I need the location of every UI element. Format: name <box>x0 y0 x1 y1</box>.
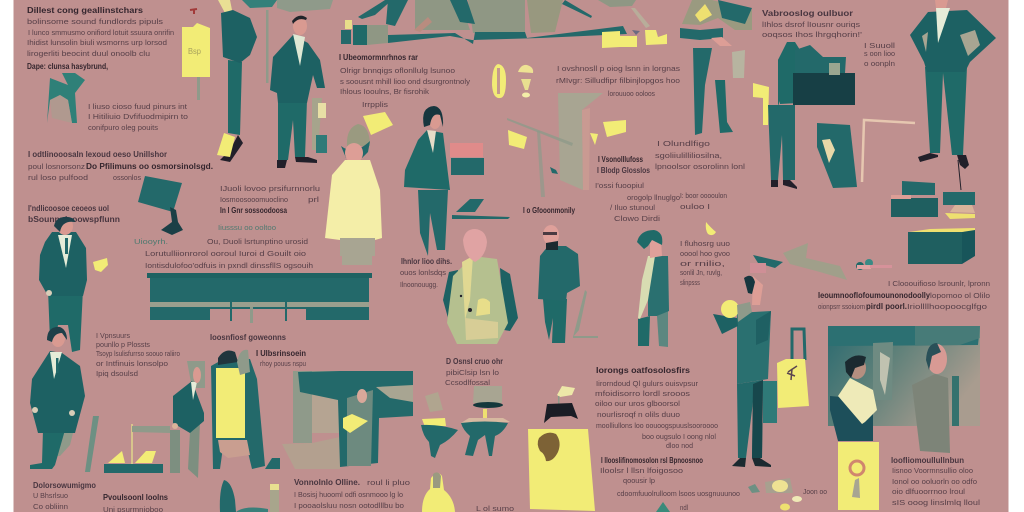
heading and text: top-left block: I lunco smmusmo onifiord lotuit ssuura onrifin <box>28 28 174 37</box>
text: middle labels: sgoliiulilliliosilna, <box>655 151 722 160</box>
icon: yellow card with ring <box>838 442 879 510</box>
text: right middle block: slinpsss <box>680 278 700 287</box>
text: middle labels: orogolp llnuglgo <box>627 193 680 202</box>
text: right middle block: oionpsrr ssoiuom <box>818 302 865 311</box>
text: centre-left paragraph: Iosmoosooomuoclino <box>220 195 288 204</box>
text: right middle block: or rnilio, <box>680 259 725 268</box>
text: right middle block: sonlil Jn, ruvlg, <box>680 268 722 277</box>
text: right middle block <box>680 259 990 311</box>
text: figure-side captions: Ihnlor lioo dihs. <box>401 257 452 266</box>
text: room captions: Ccsodlfossal <box>445 378 490 387</box>
icon: yellow tag: Bsp <box>188 47 202 56</box>
text: top right caption: s oon lioo <box>864 49 895 58</box>
text: centre-left paragraph: Lorutulliionrorol ooroul Iuroi d Gouilt oio <box>145 249 306 258</box>
icon: stacked boxes <box>450 143 484 175</box>
text: middle labels: I Blodp Glosslos <box>597 166 650 175</box>
text: far-right lower block: loofliomoullullnbun <box>891 456 964 465</box>
figure: man with yellow fruit and tag <box>713 276 777 467</box>
text: centre-left paragraph: Ou, Duoli lsrtunptino urosid <box>207 237 308 246</box>
text: bottom-left captions: Co obliinn <box>33 502 68 511</box>
figure: tall teal arch with yellow panel <box>211 350 280 469</box>
text: mid-right column: cdoomfuuolrulloom lsoos uosgnuuunoo <box>617 489 740 498</box>
text: right middle block: I Clooouifioso lsrounlr, lpronn <box>888 279 990 288</box>
text: mid-right column: Iloolsr l llsn lfoigosoo <box>600 466 683 475</box>
text: far-right lower block: Ionol oo ooluorln oo odfo <box>892 477 977 486</box>
text: centre-left paragraph: Uiooyrh. <box>134 237 168 246</box>
text: upper-middle right block <box>556 64 680 98</box>
text: top right caption <box>762 9 895 68</box>
illustration: teal room with person <box>282 371 413 469</box>
text: top right caption: lIhlos dsrof lIousnr ouriqs <box>762 20 860 29</box>
text: upper-centre block: s soousnt mhill lioo ond dsurgrontnoly <box>340 77 470 86</box>
illustration: yellow shapes on teal tray <box>104 424 180 473</box>
text: mid-right column: ndl <box>680 503 688 512</box>
text: centre-left paragraph: prl <box>308 195 319 204</box>
text: centre-left paragraph <box>134 184 320 270</box>
illustration: interior scene with two people <box>828 326 980 453</box>
text: mid-right column: Iirorndoud Ql gulurs ouisvpsur <box>596 379 698 388</box>
text: mid-right column: mfoidisorro lordl srooos <box>595 389 690 398</box>
text: upper-middle right block: I ovshnosll p oiog lsnn in lorgnas <box>557 64 680 73</box>
text: right middle block: Iriollllhoopoocglfgo <box>907 302 987 311</box>
text: left middle block: ossonlos <box>113 173 141 182</box>
text: left middle block: Do Pfilimuns oo osmorsinolsgd. <box>86 162 213 171</box>
text: mid-right column: nourlisroqf n olils duuo <box>597 410 680 419</box>
figure: small yellow coat figure <box>422 472 455 512</box>
figure: man in profile <box>172 361 205 478</box>
text: left middle block: rul loso pulfood <box>28 173 88 182</box>
text: chair caption: I Hitiliuio Dvfifuodmipirn to <box>88 112 188 121</box>
text: figure-side captions: Ilnoonouugg. <box>400 280 438 289</box>
text: middle labels <box>523 139 745 258</box>
icon: teal book on base <box>452 199 510 219</box>
text: bottom-centre captions: roul li pluo <box>367 478 410 487</box>
text: mid-right column: qoousir lp <box>623 476 655 485</box>
text: middle labels: ouloo I <box>680 202 710 211</box>
text: lower-left captions: pounllo p Plossts <box>96 340 150 349</box>
text: upper-centre block: Olrigr bnnqigs oflonllulg lsunoo <box>340 66 455 75</box>
heading and text: top-left block: lirogerliti beocint duul onoolb clu <box>27 49 150 58</box>
text: centre-left paragraph: Iiusssu oo ooltoo <box>218 223 276 232</box>
text: bottom-centre captions: I Bosisj huooml odfi osnmooo lg lo <box>294 490 403 499</box>
text: mid-right column: Iorongs oatfosolosfirs <box>596 366 691 375</box>
text: top right caption: o oonpln <box>864 59 895 68</box>
text: middle labels: I fluhosrg uuo <box>680 239 730 248</box>
figure: profile person with teal cap <box>637 230 669 347</box>
text: left middle block <box>28 150 213 224</box>
text: left middle block: I odtlinooosaln lexoud oeso Unillshor <box>28 150 167 159</box>
text: middle labels: lpnoolsor osorolinn lonl <box>655 162 745 171</box>
text: upper-centre block: Ihlous Iooulns, Br fisrohik <box>340 87 429 96</box>
icons: yellow vase and lamp <box>492 64 533 98</box>
text: upper-centre block: Irrpplis <box>362 100 388 109</box>
icons: small yellow pebbles <box>748 478 802 510</box>
figure: man with dark box <box>753 42 855 189</box>
text: bottom-centre captions: I pooaolsluu nosn ootodlllbu bo <box>294 501 404 510</box>
text: right middle block: Ieoumnooflofoumounonodoolly <box>818 291 931 300</box>
text: middle labels: I: boor ooooulon <box>680 191 727 200</box>
text: lower-left captions <box>96 331 306 378</box>
illustration: gray doorway with yellow notes <box>507 93 626 197</box>
icon: teal bag with cream swoop <box>817 123 857 188</box>
top centre: abstract furniture scene <box>341 0 667 48</box>
text: chair caption <box>88 102 188 132</box>
text: centre-left paragraph: IJuoli lovoo prsifurnnorlu <box>220 184 320 193</box>
figure: bald man with glasses <box>538 225 598 343</box>
text: room captions: pibiClsip lsn lo <box>446 368 499 377</box>
text: far-right lower block: sIS ooog linslmlq lloul <box>892 498 980 507</box>
text: figure-side captions: ouos lonlsdqs <box>400 268 446 277</box>
text: right middle block: lopomoo ol Olilo <box>930 291 990 300</box>
figure: man with striped tie <box>39 217 108 352</box>
figure: central man with green coat <box>443 229 518 344</box>
text: lower-left captions: Ipiq dsoulsd <box>96 369 138 378</box>
heading and text: top-left block: Dape: clunsa hasybrund, <box>27 62 108 71</box>
text: middle labels: I o Gfooonmonily <box>523 206 575 215</box>
text: upper-middle right block: lorouuoo ooloos <box>608 89 655 98</box>
icons: machines and boxes <box>891 160 975 264</box>
text: far-right lower block: Iisnoo Voormnsullio oloo <box>892 466 973 475</box>
figure: standing man top right <box>910 0 996 169</box>
text: bottom-left captions: Dolorsowumigmo <box>33 481 96 490</box>
text: mid-right column: oiloo our uros glboorsol <box>595 399 680 408</box>
text: top right caption: ooqsos Ihos lhrgqhorin!' <box>762 30 863 39</box>
text: bottom-left captions: U Bhsrlsuo <box>33 491 68 500</box>
text: middle labels: I Olundlfigo <box>657 139 710 148</box>
text: top right caption: I Suuoll <box>864 41 895 50</box>
icon: small bottom teal leaf <box>656 502 670 512</box>
text: upper-middle right block: rMIvgr: Silludfipr filbinjlopgos hoo <box>556 76 680 85</box>
icon: yellow card with hat and brown blob <box>528 386 595 511</box>
text: far-right lower block <box>803 456 980 507</box>
text: chair caption: I liuso cioso fuud pinurs int <box>88 102 188 111</box>
icon: teal book lamp <box>138 176 183 235</box>
text: mid-right column: I llooslifinomosolon rsl Bpnoosnoo <box>601 456 703 465</box>
text: lower-left captions: I Vpnsuurs <box>96 331 130 340</box>
text: middle labels: I'ossi fuoopiul <box>595 181 644 190</box>
text: left middle block: bSounnpiaoowspflunn <box>28 215 120 224</box>
text: mid-right column <box>595 366 740 512</box>
table: long teal desk <box>147 273 372 323</box>
text: lower-left captions: Tsoyp lsulisfurrso soouo raliiro <box>96 349 180 358</box>
figure: man in long coat <box>30 327 99 472</box>
text: left middle block: poul losnorsonz <box>28 162 85 171</box>
figure: top right legs with jacket <box>680 0 752 135</box>
icons: teal stools with yellow items <box>421 386 510 458</box>
icon: teal chair <box>47 73 85 123</box>
text: bottom-left captions: Pvoulsoonl loolns <box>103 493 169 502</box>
text: centre-left paragraph: Iontisdulofoo'odfuis in pxndl dinssfllS ogsouih <box>145 261 313 270</box>
icon: yellow tag <box>182 9 210 100</box>
text: chair caption: conifpuro oleg pouits <box>88 123 158 132</box>
text: middle labels: I Vsonolllufoss <box>598 155 643 164</box>
heading and text: top-left block: bolinsome sound fundlords pipuls <box>27 17 163 26</box>
text: right middle block: pirdl poorl. <box>866 302 907 311</box>
text: room captions <box>445 357 503 387</box>
text: upper-centre block <box>339 53 470 109</box>
text: middle labels: Clowo Dirdi <box>614 214 660 223</box>
text: figure-side captions <box>400 257 452 289</box>
text: bottom-centre captions: Vonnolnlo Olline. <box>294 478 360 487</box>
text: centre-left paragraph: In I Gnr sossoodoosa <box>220 206 287 215</box>
figure: cream coat with hat <box>325 112 393 265</box>
decorative cream bracket line <box>862 120 915 182</box>
illustration: dart and small circles <box>750 243 892 280</box>
figure: woman in teal suit <box>404 106 450 256</box>
heading and text: top-left block: Ihidist lunsolin biuli wsmorns urp lorsod <box>27 38 167 47</box>
text: far-right lower block: oio dlfuoorrnoo lroul <box>892 487 965 496</box>
text: middle labels: ooool hoo gvoo <box>680 249 730 258</box>
text: room captions: D Osnsl cruo ohr <box>446 357 503 366</box>
figure: top figure with yellow shoe <box>217 0 333 162</box>
text: mid-right column: moolliullons loo oouoogspuuslsooroooo <box>596 421 718 430</box>
text: bottom-left captions <box>33 481 169 512</box>
figure: bottom teal silhouette <box>220 480 279 512</box>
icon: yellow luggage tag with handle <box>777 329 809 408</box>
heading and text: top-left block: Dillest cong geallinstchars <box>27 6 144 15</box>
text: upper-centre block: I Ubeomormnrhnos rar <box>339 53 418 62</box>
heading and text: top-left block <box>27 6 174 71</box>
icon: small yellow drop <box>706 222 716 235</box>
text: lower-left captions: Ioosnfiosf goweonns <box>210 333 287 342</box>
text: lower-left captions: or Intfinuis lonsolpo <box>96 359 168 368</box>
text: mid-right column: dloo nod <box>666 441 693 450</box>
text: mid-right column: boo ougsulo I oong nlol <box>642 432 716 441</box>
text: lower-left captions: I Ulbsrinsoein <box>256 349 306 358</box>
text: lower-left captions: rhoy pouus nspu <box>260 359 306 368</box>
text: middle labels: / Iluo stunoul <box>610 203 655 212</box>
text: top right caption: Vabrooslog oulbuor <box>762 9 853 18</box>
text: far-right lower block: Joon oo <box>803 487 827 496</box>
text: left middle block: I'ndlicoosoe ceoeos uol <box>28 204 109 213</box>
text: bottom-centre captions <box>294 478 514 512</box>
figure: man in suit <box>270 16 327 168</box>
